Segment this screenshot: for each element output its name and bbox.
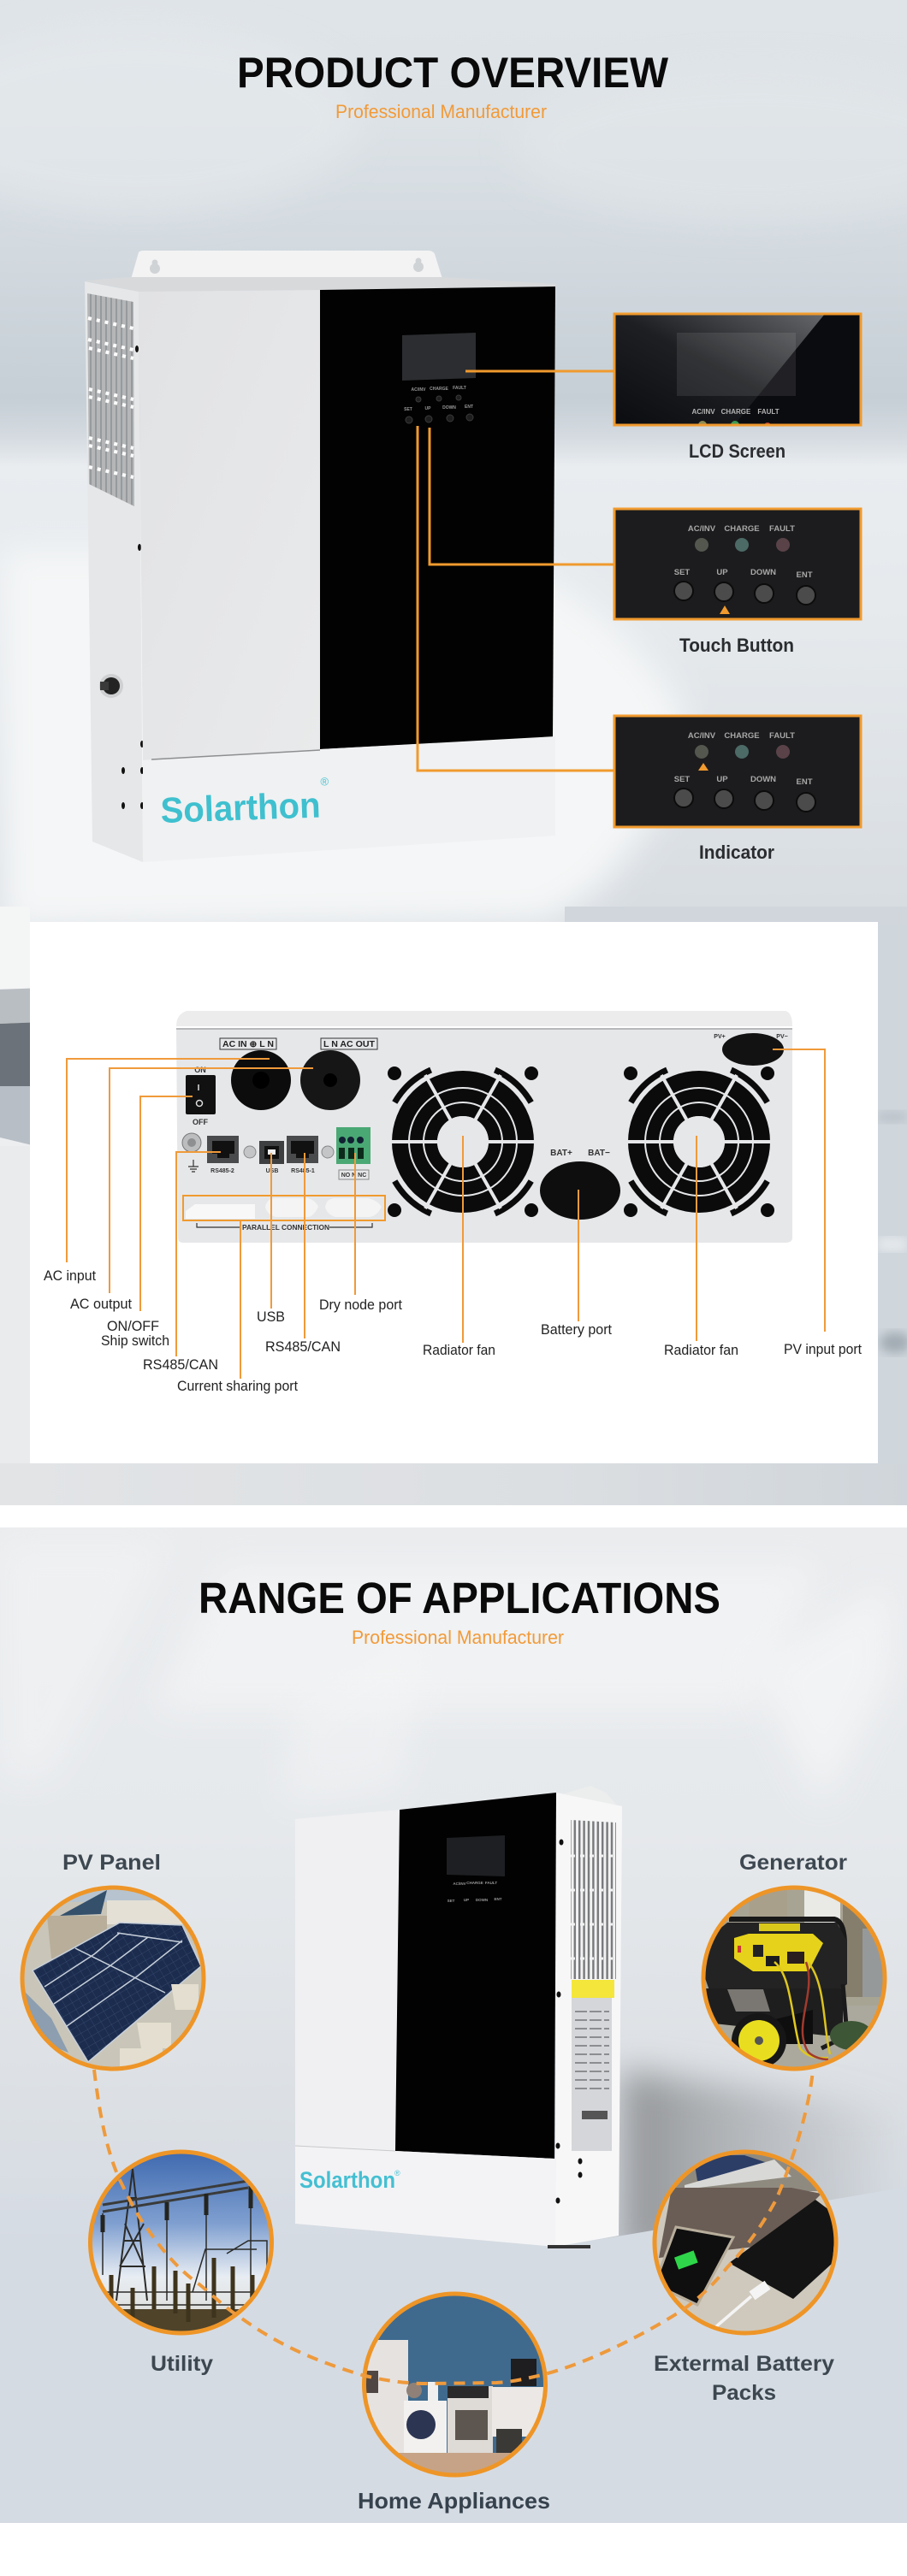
ON/OFF rocker switch: ON — [194, 1066, 206, 1074]
port labels: Radiator fan — [423, 1342, 495, 1358]
lower cover — [295, 2146, 555, 2247]
unit control labels: CHARGE — [466, 1881, 483, 1885]
PV port: PV+ — [714, 1034, 726, 1040]
port leader lines — [67, 1049, 825, 1379]
section: range of applications — [0, 1527, 907, 2523]
USB port — [259, 1141, 284, 1174]
RS485-1 port: RS485-1 — [291, 1168, 315, 1174]
PV port: PV− — [776, 1034, 788, 1040]
ON/OFF rocker switch — [186, 1066, 216, 1126]
callout: LCD screen: FAULT — [757, 408, 780, 416]
unit control labels: FAULT — [485, 1881, 497, 1885]
subtitle: Professional Manufacturer — [335, 101, 547, 122]
unit control labels: SET — [448, 1899, 455, 1903]
title: PRODUCT OVERVIEW — [237, 49, 669, 97]
port labels: AC output — [70, 1296, 132, 1312]
unit control labels: DOWN — [442, 405, 456, 411]
battery port — [540, 1149, 620, 1220]
unit control labels: SET — [404, 407, 412, 412]
label: Extermal Battery Packs: Extermal Battery — [654, 2352, 834, 2376]
unit control labels: CHARGE — [430, 387, 448, 392]
port labels: Ship switch — [101, 1332, 169, 1349]
photo: generator — [697, 1882, 890, 2074]
port labels: Dry node port — [319, 1297, 402, 1313]
section: product overview — [0, 0, 907, 1505]
black glass — [395, 1793, 556, 2159]
port labels: RS485/CAN — [265, 1338, 341, 1355]
battery port: BAT+ — [550, 1149, 572, 1158]
unit control labels: AC/INV — [412, 387, 426, 393]
unit control labels: ENT — [465, 405, 473, 410]
dashed connector arc — [94, 2070, 813, 2384]
RS485-1 port — [287, 1136, 318, 1174]
inverter rear view — [176, 1011, 792, 1243]
product: inverter side view — [295, 1786, 622, 2248]
USB port: USB — [266, 1168, 278, 1174]
wall bracket — [132, 251, 442, 277]
unit control labels: FAULT — [453, 386, 466, 391]
front white door — [139, 290, 321, 760]
port labels: Radiator fan — [664, 1342, 738, 1358]
label: Touch Button: Touch Button — [679, 635, 794, 656]
unit control labels: DOWN — [476, 1898, 488, 1902]
radiator fan left — [388, 1066, 538, 1217]
port labels: PV input port — [784, 1341, 862, 1357]
label: Home Appliances: Home Appliances — [358, 2488, 550, 2514]
Solarthon logo: Solarthon — [160, 784, 321, 830]
photo: home appliances — [359, 2289, 551, 2480]
leader lines to callouts — [418, 371, 614, 771]
LCD — [447, 1835, 505, 1876]
label: LCD Screen: LCD Screen — [689, 440, 785, 462]
ON/OFF rocker switch: OFF — [193, 1118, 208, 1126]
AC labels: L N AC OUT — [323, 1040, 375, 1049]
callout: LCD screen: AC/INV — [691, 408, 715, 416]
unit control labels: UP — [464, 1898, 469, 1902]
LCD on unit — [402, 333, 476, 381]
label: Extermal Battery Packs — [654, 2352, 834, 2405]
ship switch knob — [99, 674, 123, 698]
background: misty grey backdrop with white platform — [0, 0, 907, 1505]
port labels — [44, 1267, 862, 1394]
black glass panel — [320, 287, 555, 749]
side panel with vents and labels — [555, 1793, 622, 2247]
lower white cover — [143, 736, 553, 809]
unit control labels: UP — [425, 406, 431, 411]
unit control labels: ENT — [495, 1897, 502, 1901]
subtitle: Professional Manufacturer — [352, 1627, 564, 1648]
AC labels: AC IN ⊕ L N — [222, 1040, 274, 1049]
parallel connection ports — [183, 1196, 385, 1232]
label: Generator: Generator — [739, 1851, 847, 1875]
side panel with vents — [85, 281, 144, 862]
PV port — [714, 1033, 788, 1066]
callout: touch button — [614, 509, 861, 619]
unit control labels — [404, 386, 473, 423]
product: inverter front view — [85, 251, 555, 862]
dry node green terminal — [336, 1127, 371, 1179]
callout: LCD screen: CHARGE — [721, 408, 751, 416]
label: Indicator: Indicator — [699, 842, 774, 863]
Solarthon logo: ® — [320, 775, 329, 788]
port labels: RS485/CAN — [143, 1356, 218, 1373]
label: Extermal Battery Packs: Packs — [712, 2381, 776, 2405]
unit control labels: AC/INV — [453, 1882, 466, 1886]
port labels: AC input — [44, 1267, 96, 1284]
title: RANGE OF APPLICATIONS — [199, 1574, 720, 1622]
RS485-2 port — [207, 1136, 239, 1174]
AC input grommet — [231, 1050, 291, 1110]
callout: indicator — [614, 716, 861, 827]
label: Utility: Utility — [151, 2352, 213, 2376]
parallel connection ports: PARALLEL CONNECTION — [242, 1223, 329, 1232]
battery port: BAT− — [588, 1149, 610, 1158]
unit control labels — [448, 1881, 502, 1903]
port labels: ON/OFF — [107, 1318, 159, 1334]
Solarthon logo: ® — [394, 2169, 400, 2177]
label: PV Panel: PV Panel — [62, 1851, 161, 1875]
callout: LCD screen — [614, 314, 861, 429]
front door — [295, 1810, 400, 2151]
Solarthon logo: Solarthon — [299, 2167, 395, 2193]
background: wall with window light and floor — [0, 1527, 907, 2523]
port labels: USB — [257, 1309, 285, 1325]
port labels: Battery port — [541, 1321, 612, 1338]
dry node green terminal: NO N NC — [341, 1173, 366, 1179]
AC output grommet — [300, 1050, 360, 1110]
photo: utility — [86, 2147, 277, 2339]
panel: rear ports diagram — [30, 922, 878, 1463]
photo: PV panel — [17, 1882, 209, 2074]
RS485-2 port: RS485-2 — [210, 1168, 234, 1174]
AC labels — [220, 1038, 377, 1049]
radiator fan right — [624, 1066, 774, 1217]
photo: external battery packs — [650, 2147, 842, 2338]
ground terminal — [182, 1133, 201, 1172]
port labels: Current sharing port — [177, 1378, 298, 1394]
